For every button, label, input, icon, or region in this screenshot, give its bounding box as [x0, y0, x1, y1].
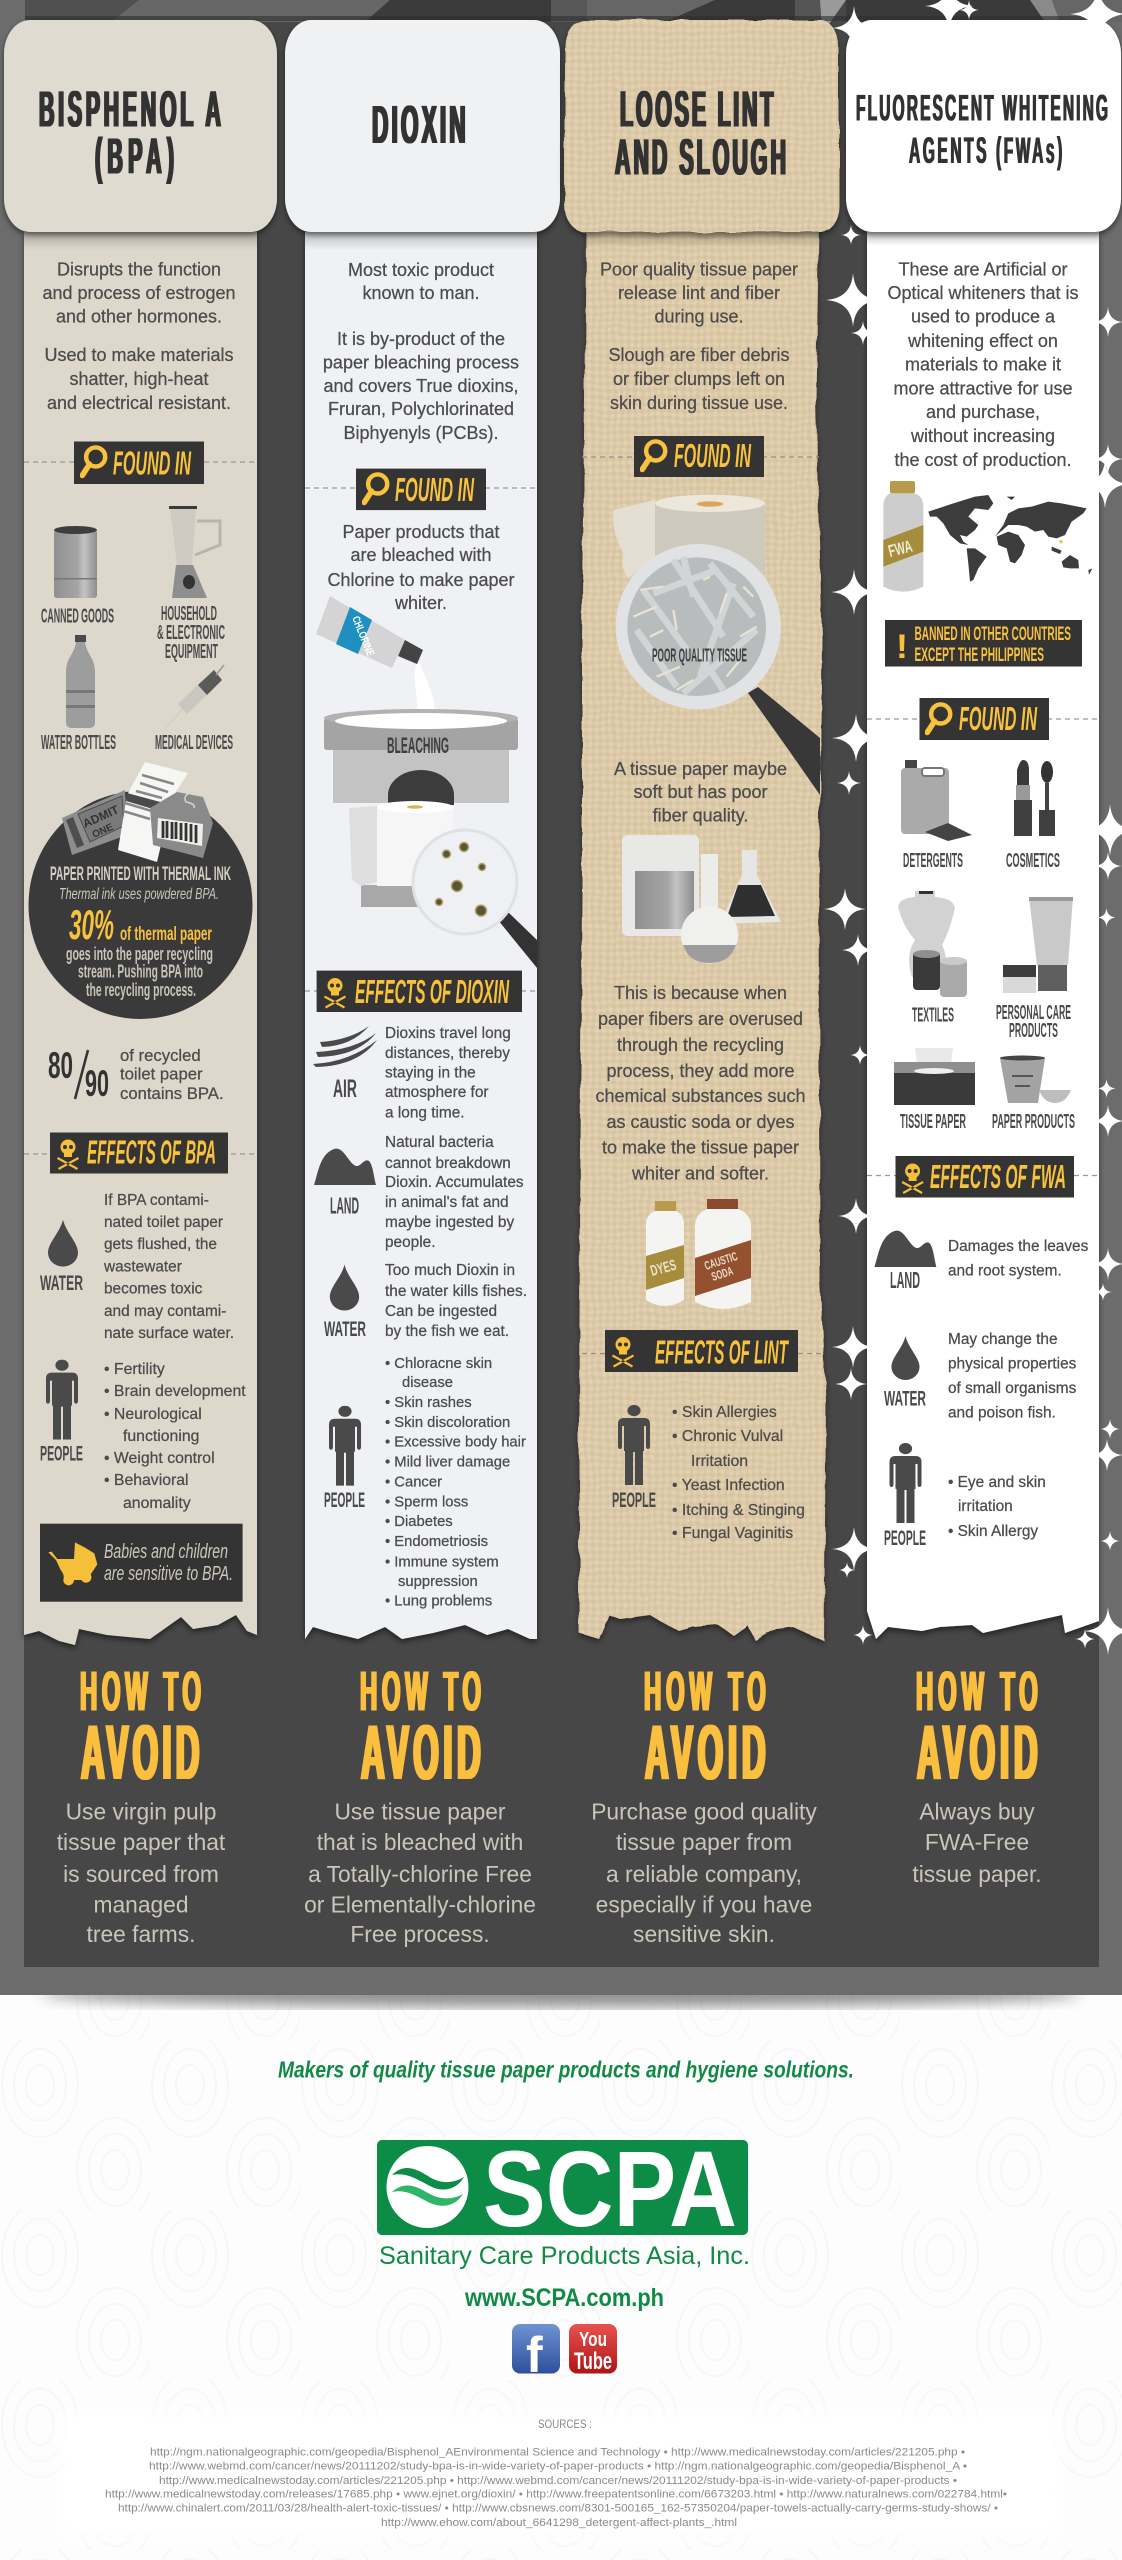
icon: FWA bottle: FWA	[886, 537, 914, 561]
icon: beaker and flasks	[622, 835, 781, 964]
intro text: and electrical resistant.	[47, 393, 231, 413]
icon: chlorine bottle pouring: CHLORINE	[349, 615, 376, 658]
icon: personal care products: PRODUCTS	[1009, 1020, 1058, 1042]
intro text: These are Artificial or	[898, 260, 1068, 280]
effects of dioxin banner	[317, 971, 522, 1012]
icon: bleaching vat	[324, 709, 518, 805]
callout: banned in other countries	[885, 620, 1082, 666]
found in banner: FOUND IN	[395, 471, 475, 508]
text block: soft but poor fiber: fiber quality.	[653, 806, 748, 826]
text block: recycling overuse: to make the tissue paper	[602, 1138, 799, 1158]
how to avoid: lint: sensitive skin.	[633, 1921, 775, 1947]
land effect: Dioxin. Accumulates	[385, 1174, 524, 1191]
land effect: Damages the leaves	[948, 1238, 1089, 1255]
people effect: • Weight control	[104, 1450, 215, 1467]
intro text	[42, 260, 236, 413]
paper strip: lint	[579, 225, 826, 1641]
icon: dyes bottle: DYES	[649, 1257, 678, 1280]
people effect: • Excessive body hair	[385, 1434, 526, 1450]
intro text: Fruran, Polychlorinated	[328, 399, 514, 419]
how to avoid: dioxin: that is bleached with	[317, 1829, 523, 1855]
people effect: anomality	[123, 1495, 191, 1512]
water effect	[40, 1192, 234, 1342]
people effect: • Immune system	[385, 1554, 499, 1570]
water effect: and may contami-	[104, 1303, 226, 1320]
intro text: without increasing	[910, 426, 1055, 446]
stat: 80/90: 80	[48, 1045, 73, 1086]
water effect: Can be ingested	[385, 1303, 497, 1320]
icon: paper products	[992, 1056, 1075, 1133]
land effect: Natural bacteria	[385, 1134, 494, 1151]
sources	[60, 2412, 1060, 2537]
icon: admit one ticket	[62, 790, 127, 855]
people effect: • Neurological	[104, 1406, 202, 1423]
callout: thermal ink circle: the recycling process.	[86, 980, 196, 1000]
land effect	[314, 1134, 524, 1251]
intro text: shatter, high-heat	[69, 369, 209, 389]
intro text: or fiber clumps left on	[613, 369, 785, 389]
how to avoid: lint: AVOID	[645, 1709, 766, 1796]
people effect: • Diabetes	[385, 1514, 453, 1530]
people effect: functioning	[123, 1428, 199, 1445]
logo: SCPA: SCPA	[483, 2128, 737, 2249]
effects of lint banner	[605, 1330, 798, 1372]
text block: recycling overuse: through the recycling	[617, 1035, 784, 1055]
how to avoid: BPA	[57, 1660, 226, 1947]
water effect: physical properties	[948, 1356, 1077, 1373]
icon: household equipment blender: EQUIPMENT	[165, 641, 218, 663]
icon: water bottle	[41, 635, 116, 754]
callout: thermal ink circle: Thermal ink uses powdered BPA.	[59, 886, 219, 903]
water effect: by the fish we eat.	[385, 1323, 509, 1340]
people effect	[40, 1360, 246, 1512]
land effect: in animal's fat and	[385, 1194, 509, 1211]
water effect	[884, 1331, 1077, 1422]
icon: magnifier over poor quality tissue	[616, 544, 820, 795]
shade below header	[867, 232, 1099, 246]
icon: household equipment blender: HOUSEHOLD	[161, 603, 217, 625]
panel: Bisphenol A column: & ELECTRONIC	[157, 622, 225, 644]
icon: tissue box: TISSUE PAPER	[900, 1111, 966, 1133]
how to avoid: dioxin: a Totally-chlorine Free	[308, 1861, 532, 1887]
water effect: nated toilet paper	[104, 1214, 223, 1231]
how to avoid: BPA: tissue paper that	[57, 1829, 226, 1855]
callout: babies and children: are sensitive to BPA.	[104, 1563, 233, 1585]
air effect: a long time.	[385, 1104, 465, 1122]
icon: magnifier with bacteria	[413, 830, 537, 968]
shade below header	[24, 232, 257, 250]
people effect: • Lung problems	[385, 1594, 492, 1610]
how to avoid: BPA: is sourced from	[63, 1861, 219, 1887]
how to avoid: BPA: tree farms.	[87, 1921, 195, 1947]
icon: caustic soda bottle	[695, 1199, 751, 1309]
stat: 80/90: of recycled	[120, 1046, 201, 1065]
stat: 80/90: contains BPA.	[120, 1084, 224, 1103]
people effect: PEOPLE	[612, 1489, 656, 1512]
people effect: Irritation	[691, 1453, 748, 1470]
sources: SOURCES :	[538, 2417, 592, 2431]
people effect: • Fertility	[104, 1361, 165, 1378]
intro text: whitening effect on	[907, 331, 1058, 351]
people effect: • Brain development	[104, 1383, 246, 1400]
callout: thermal ink circle	[28, 762, 252, 1019]
intro text: and other hormones.	[56, 306, 222, 326]
shade below header	[586, 232, 819, 248]
intro text: the cost of production.	[894, 450, 1072, 470]
people effect	[324, 1356, 526, 1610]
text block: recycling overuse: whiter and softer.	[631, 1164, 769, 1184]
text block: recycling overuse: chemical substances such	[595, 1086, 806, 1106]
heading: Loose lint and slough: AND SLOUGH	[615, 130, 786, 186]
icon: youtube: You	[579, 2329, 607, 2351]
icon: magnifier over poor quality tissue: POOR QUALITY TISSUE	[652, 646, 747, 666]
land effect: maybe ingested by	[385, 1214, 514, 1231]
found in banner	[74, 442, 204, 484]
stat: 80/90: toilet paper	[120, 1065, 203, 1084]
found in text: Chlorine to make paper	[327, 570, 515, 590]
heading: Fluorescent whitening agents	[856, 88, 1108, 172]
people effect: • Itching & Stinging	[672, 1502, 805, 1519]
sources: http://www.webmd.com/cancer/news/20111202/study-bpa-is-in-wide-variety-of-paper-products • http://ngm.nationalgeographic.com/geopedia/Bisphenol_A •	[149, 2460, 967, 2472]
text block: soft but poor fiber	[614, 759, 787, 826]
icon: paper roll	[613, 495, 765, 578]
sparkles around the whitening column	[824, 0, 1122, 1655]
panel: Bisphenol A column	[4, 20, 277, 1947]
paper strip: FWA	[867, 232, 1099, 1639]
icon: FWA bottle	[883, 481, 923, 592]
intro text: and covers True dioxins,	[323, 376, 519, 396]
how to avoid: dioxin: AVOID	[361, 1709, 481, 1796]
shade below header	[305, 232, 537, 250]
intro text: Poor quality tissue paper	[600, 260, 798, 280]
people effect: • Skin Allergy	[948, 1523, 1038, 1540]
intro text: known to man.	[362, 283, 480, 303]
stat: 80/90: 90	[85, 1063, 109, 1104]
text block: recycling overuse: as caustic soda or dyes	[606, 1112, 795, 1132]
icon: personal care products	[996, 897, 1073, 1042]
header card	[565, 20, 839, 232]
sources: http://www.ehow.com/about_6641298_detergent-affect-plants_.html	[381, 2517, 737, 2529]
header card	[846, 20, 1121, 232]
sources: http://www.medicalnewstoday.com/articles/221205.php • http://www.webmd.com/cancer/news/20111202/study-bpa-is-in-wide-variety-of-paper-products •	[159, 2475, 957, 2487]
panel: Loose lint and slough column: EFFECTS OF LINT	[655, 1334, 789, 1371]
icon: detergents	[901, 760, 972, 872]
heading: Bisphenol A: BISPHENOL A	[39, 82, 221, 138]
intro text	[323, 260, 519, 443]
callout: thermal ink circle: stream. Pushing BPA into	[78, 962, 203, 982]
how to avoid: dioxin: Use tissue paper	[334, 1799, 506, 1825]
callout: thermal ink circle: 30%	[69, 901, 114, 948]
people effect: suppression	[398, 1574, 478, 1590]
found in text: Paper products that	[342, 522, 500, 542]
how to avoid: FWA: Always buy	[919, 1799, 1035, 1825]
callout: banned in other countries: !	[896, 628, 908, 666]
people effect: PEOPLE	[324, 1489, 365, 1512]
air effect: staying in the	[385, 1064, 476, 1082]
intro text: paper bleaching process	[323, 353, 519, 373]
heading: Bisphenol A	[39, 82, 221, 185]
intro text	[600, 260, 798, 413]
people effect: • Cancer	[385, 1474, 442, 1490]
how to avoid: lint: HOW TO	[644, 1660, 766, 1724]
found in banner	[920, 698, 1049, 740]
people effect: PEOPLE	[884, 1527, 926, 1550]
intro text: release lint and fiber	[618, 283, 780, 303]
air effect: atmosphere for	[385, 1084, 489, 1101]
intro text: Disrupts the function	[57, 260, 221, 280]
world map	[928, 495, 1092, 582]
text block: recycling overuse: process, they add more	[606, 1061, 795, 1081]
people effect: • Behavioral	[104, 1472, 189, 1489]
heading: Dioxin: DIOXIN	[372, 95, 466, 155]
land effect	[874, 1231, 1089, 1293]
tagline: Makers of quality tissue paper products and hygiene solutions.	[278, 2057, 854, 2083]
icon: textiles: TEXTILES	[912, 1005, 954, 1027]
found in banner	[634, 436, 764, 477]
water effect: becomes toxic	[104, 1280, 203, 1298]
how to avoid: dioxin	[304, 1660, 536, 1947]
found in text: are bleached with	[350, 545, 492, 565]
water effect: gets flushed, the	[104, 1236, 217, 1253]
paper strip: BPA	[24, 232, 257, 1645]
text block: recycling overuse: This is because when	[614, 983, 787, 1003]
intro text: used to produce a	[911, 306, 1056, 326]
water effect: nate surface water.	[104, 1325, 234, 1342]
water effect: the water kills fishes.	[385, 1283, 527, 1300]
effects of FWA banner	[896, 1156, 1074, 1198]
water effect: May change the	[948, 1331, 1058, 1348]
water effect: WATER	[40, 1272, 83, 1295]
intro text: more attractive for use	[893, 379, 1073, 399]
icon: toilet paper roll	[349, 801, 453, 907]
found in text	[327, 522, 515, 613]
panel: Fluorescent whitening agents column: COSMETICS	[1006, 850, 1060, 872]
website url: www.SCPA.com.ph	[464, 2284, 664, 2312]
sources: http://www.chinalert.com/2011/03/28/health-alert-toxic-tissues/ • http://www.cbsnews.com/8301-500165_162-57350204/paper-towels-actually-carry-germs-study-shows/ •	[118, 2502, 998, 2514]
air effect	[313, 1025, 511, 1122]
icon: household equipment blender	[157, 506, 225, 663]
how to avoid: BPA: Use virgin pulp	[66, 1799, 216, 1825]
how to avoid: lint: a reliable company,	[606, 1861, 802, 1887]
land effect: and root system.	[948, 1262, 1062, 1280]
panel: Loose lint and slough column	[565, 20, 839, 1947]
how to avoid: lint	[591, 1660, 817, 1947]
icon: price tag with barcode	[150, 792, 213, 858]
how to avoid: FWA	[912, 1660, 1042, 1887]
water effect	[324, 1262, 527, 1341]
callout: thermal ink circle: of thermal paper	[120, 924, 212, 945]
icon: facebook	[512, 2324, 560, 2383]
water effect: of small organisms	[948, 1380, 1077, 1397]
people effect: • Skin Allergies	[672, 1404, 777, 1421]
how to avoid: dioxin: HOW TO	[360, 1660, 481, 1724]
water effect: Too much Dioxin in	[385, 1262, 515, 1279]
icon: textiles	[898, 891, 967, 1027]
people effect: • Skin discoloration	[385, 1415, 510, 1431]
how to avoid: dioxin: or Elementally-chlorine	[304, 1892, 536, 1918]
callout: thermal ink circle: PAPER PRINTED WITH THERMAL INK	[50, 864, 231, 885]
text block: soft but poor fiber: soft but has poor	[633, 782, 768, 802]
icon: facebook: f	[526, 2327, 543, 2383]
logo: SCPA	[377, 2128, 750, 2270]
panel: Bisphenol A column: WATER BOTTLES	[41, 732, 116, 754]
callout: thermal ink circle: goes into the paper recycling	[66, 944, 213, 964]
water effect: WATER	[324, 1318, 366, 1341]
people effect: • Eye and skin	[948, 1474, 1046, 1491]
effects of dioxin banner: EFFECTS OF DIOXIN	[355, 973, 510, 1010]
icon: cosmetics	[1006, 760, 1060, 872]
heading: Loose lint and slough: LOOSE LINT	[620, 82, 773, 138]
icon: detergents: DETERGENTS	[903, 850, 963, 872]
how to avoid: BPA: managed	[93, 1892, 189, 1918]
intro text: during use.	[654, 306, 744, 326]
people effect: • Endometriosis	[385, 1534, 488, 1550]
panel: Fluorescent whitening agents column	[846, 20, 1121, 1887]
found in banner: FOUND IN	[959, 700, 1038, 737]
icon: chlorine bottle pouring	[316, 596, 434, 716]
water effect: If BPA contami-	[104, 1192, 209, 1209]
intro text: and process of estrogen	[42, 283, 236, 303]
icon: bleaching vat: BLEACHING	[387, 733, 449, 758]
intro text: Used to make materials	[44, 345, 234, 365]
land effect: people.	[385, 1234, 436, 1251]
how to avoid: BPA: AVOID	[81, 1709, 199, 1796]
header card	[4, 20, 277, 232]
people effect: • Chronic Vulval	[672, 1428, 783, 1445]
intro text: Biphyenyls (PCBs).	[343, 423, 499, 443]
panel: Bisphenol A column: MEDICAL DEVICES	[155, 732, 233, 754]
people effect: disease	[402, 1375, 453, 1391]
people effect: irritation	[958, 1498, 1013, 1515]
people effect: • Fungal Vaginitis	[672, 1525, 793, 1542]
people effect: PEOPLE	[40, 1442, 83, 1465]
people effect: • Chloracne skin	[385, 1356, 492, 1372]
sources: http://www.medicalnewstoday.com/releases/17685.php • www.ejnet.org/dioxin/ • http://www.freepatentsonline.com/6673203.html • http://www.naturalnews.com/022784.html•	[105, 2489, 1007, 2501]
icon: dyes bottle	[646, 1201, 684, 1306]
air effect: AIR	[333, 1075, 357, 1103]
intro text: It is by-product of the	[337, 329, 505, 349]
people effect	[884, 1443, 1046, 1550]
icon: canned goods	[41, 526, 114, 627]
effects of BPA banner: EFFECTS OF BPA	[87, 1134, 216, 1171]
text block: recycling overuse: paper fibers are overused	[598, 1009, 803, 1029]
how to avoid: BPA: HOW TO	[80, 1660, 201, 1724]
stat: 80/90	[48, 1045, 224, 1104]
paper strip: dioxin	[305, 232, 537, 1639]
land effect: cannot breakdown	[385, 1155, 511, 1172]
text block: recycling overuse	[595, 983, 806, 1184]
icon: youtube	[569, 2324, 617, 2375]
logo: SCPA: Sanitary Care Products Asia, Inc.	[379, 2242, 750, 2270]
intro text: skin during tissue use.	[610, 393, 788, 413]
how to avoid: dioxin: Free process.	[350, 1921, 490, 1947]
how to avoid: lint: tissue paper from	[616, 1829, 792, 1855]
water effect: and poison fish.	[948, 1404, 1056, 1422]
icon: receipt	[118, 762, 188, 862]
intro text: Slough are fiber debris	[608, 345, 790, 365]
land effect: LAND	[890, 1267, 920, 1293]
water effect: wastewater	[103, 1258, 182, 1275]
header card	[285, 20, 560, 232]
panel: Dioxin column	[285, 20, 560, 1947]
found in banner: FOUND IN	[674, 437, 752, 474]
how to avoid: FWA: FWA-Free	[925, 1829, 1029, 1855]
how to avoid: lint: Purchase good quality	[591, 1799, 817, 1825]
how to avoid: FWA: tissue paper.	[912, 1861, 1042, 1887]
people effect: • Yeast Infection	[672, 1477, 785, 1494]
heading: Bisphenol A: (BPA)	[95, 129, 174, 185]
heading: Loose lint and slough	[615, 82, 786, 186]
icon: caustic soda bottle: CAUSTIC	[703, 1249, 739, 1273]
how to avoid: FWA: AVOID	[917, 1709, 1038, 1796]
how to avoid: FWA: HOW TO	[916, 1660, 1038, 1724]
how to avoid: lint: especially if you have	[596, 1892, 812, 1918]
icon: caustic soda bottle: SODA	[710, 1264, 735, 1284]
icon: tissue box	[894, 1048, 975, 1133]
intro text: materials to make it	[905, 355, 1061, 375]
people effect: • Skin rashes	[385, 1395, 472, 1411]
people effect: • Mild liver damage	[385, 1454, 510, 1470]
water effect: WATER	[884, 1388, 926, 1411]
callout: babies and children: Babies and children	[104, 1541, 228, 1563]
found in banner	[356, 469, 486, 510]
panel: Bisphenol A column: CANNED GOODS	[41, 605, 114, 627]
icon: syringe	[155, 665, 233, 754]
air effect: Dioxins travel long	[385, 1025, 511, 1042]
sources: http://ngm.nationalgeographic.com/geopedia/Bisphenol_AEnvironmental Science and Technology • http://www.medicalnewstoday.com/articles/221205.php •	[150, 2447, 965, 2459]
icon: admit one ticket: ADMIT	[81, 802, 122, 831]
text block: soft but poor fiber: A tissue paper maybe	[614, 759, 787, 779]
heading: Fluorescent whitening agents: AGENTS (FWAs)	[909, 130, 1062, 172]
intro text: Most toxic product	[348, 260, 494, 280]
found in banner: FOUND IN	[113, 445, 192, 482]
people effect: • Sperm loss	[385, 1494, 468, 1510]
icon: youtube: Tube	[574, 2348, 612, 2375]
people effect	[612, 1404, 805, 1542]
heading: Fluorescent whitening agents: FLUORESCENT WHITENING	[856, 88, 1108, 130]
land effect: LAND	[330, 1192, 359, 1218]
intro text	[887, 260, 1079, 470]
intro text: and purchase,	[926, 402, 1040, 422]
air effect: distances, thereby	[385, 1045, 510, 1062]
intro text: Optical whiteners that is	[887, 283, 1079, 303]
found in text: whiter.	[394, 593, 447, 613]
callout: babies and children	[40, 1524, 243, 1602]
effects of BPA banner	[50, 1132, 228, 1174]
icon: admit one ticket: ONE	[91, 822, 115, 841]
